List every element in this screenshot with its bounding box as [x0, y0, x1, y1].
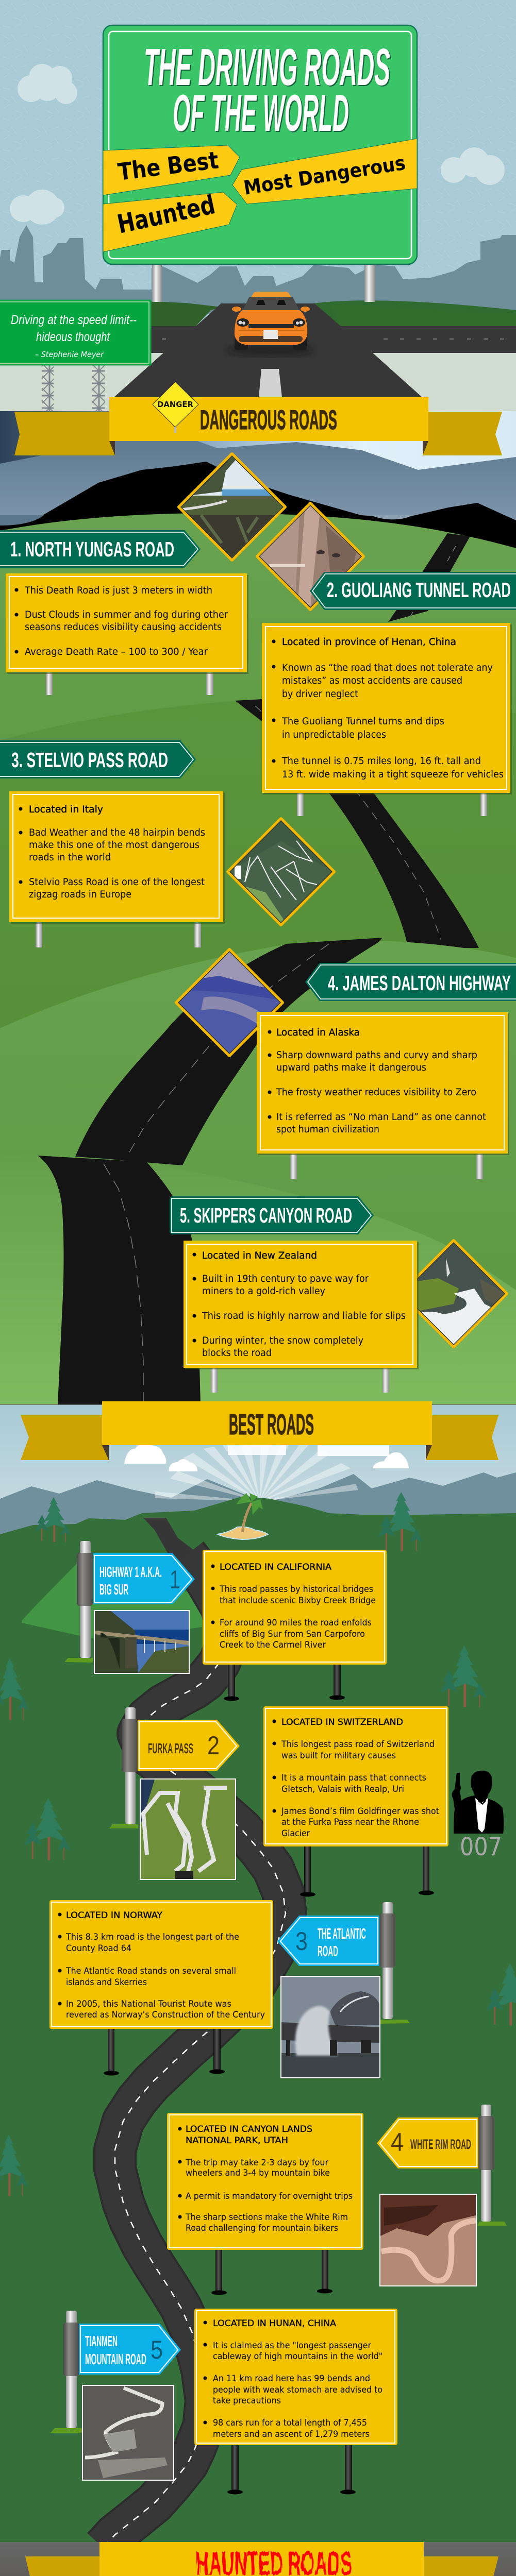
label: skippers canyon road: 5. SKIPPERS CANYON ROAD: [180, 1204, 352, 1227]
panel: stelvio facts: Located in Italy: [29, 804, 103, 815]
signpost 1: highway 1: HIGHWAY 1 A.K.A.: [99, 1564, 162, 1581]
quote sign legs: [42, 365, 105, 412]
signpost 1: highway 1: BIG SUR: [99, 1582, 128, 1598]
panel: switzerland facts: was built for military causes: [281, 1751, 396, 1760]
panel: switzerland facts: It is a mountain pass that connects: [281, 1773, 426, 1783]
banner: haunted roads: [25, 2542, 498, 2576]
photo: tianmen mountain: [82, 2385, 174, 2481]
banner: dangerous roads: [14, 382, 502, 455]
signpost 3: the atlantic road: ROAD: [318, 1943, 338, 1960]
signpost 4: white rim road: 4: [391, 2128, 404, 2157]
hill four: [0, 1156, 516, 1404]
clouds: [124, 1445, 409, 1471]
panel: james dalton facts: spot human civilization: [276, 1124, 379, 1135]
signpost 5: tianmen mountain road: [51, 2311, 181, 2433]
panel: switzerland facts: [263, 1706, 448, 1897]
panel: north yungas facts: Average Death Rate – 100 to 300 / Year: [25, 647, 208, 657]
panel: california facts: LOCATED IN CALIFORNIA: [220, 1562, 332, 1572]
panel: skippers canyon facts: blocks the road: [202, 1348, 272, 1359]
panel: guoliang facts: by driver neglect: [282, 689, 358, 700]
panel: guoliang facts: The Guoliang Tunnel turns and dips: [281, 716, 444, 727]
banner: best roads: BEST ROADS: [229, 1408, 314, 1441]
panel: hunan facts: cableway of high mountains in the world": [213, 2351, 382, 2361]
panel: skippers canyon facts: miners to a gold-rich valley: [202, 1286, 325, 1297]
panel: skippers canyon facts: Built in 19th century to pave way for: [202, 1274, 369, 1284]
signpost 5: tianmen mountain road: 5: [151, 2335, 163, 2364]
icon: james bond 007 silhouette: 007: [460, 1833, 502, 1861]
road segment three: [75, 938, 382, 1165]
ribbon: haunted: [103, 190, 237, 252]
icon: danger diamond: [153, 382, 198, 433]
section: dangerous roads landscape: [0, 411, 516, 567]
icon: danger diamond: DANGER: [157, 400, 194, 409]
sign posts: [152, 263, 375, 302]
icon: james bond 007 silhouette: [452, 1771, 504, 1861]
road segment two: [235, 699, 479, 948]
road crossing: [0, 303, 516, 398]
ribbon: haunted: Haunted: [114, 190, 218, 240]
hill two: [0, 698, 516, 1082]
panel: hunan facts: It is claimed as the "longest passenger: [213, 2341, 372, 2350]
signpost 5: tianmen mountain road: TIANMEN: [85, 2333, 118, 2350]
label: stelvio pass road: [0, 740, 196, 778]
panel: norway facts: [49, 1900, 273, 2075]
panel: switzerland facts: This longest pass road of Switzerland: [281, 1739, 435, 1749]
panel: utah facts: LOCATED IN CANYON LANDS: [186, 2124, 312, 2134]
panel: james dalton facts: [257, 1012, 509, 1179]
panel: hunan facts: LOCATED IN HUNAN, CHINA: [213, 2318, 337, 2328]
photo diamond: james dalton: [176, 950, 282, 1056]
green land: [0, 1496, 516, 2545]
road segment four: [38, 1156, 201, 1404]
mountains: [0, 1472, 516, 1546]
title road sign: [103, 25, 417, 264]
panel: skippers canyon facts: This road is highly narrow and liable for slips: [202, 1311, 406, 1321]
label: guoliang tunnel road: [310, 572, 516, 610]
panel: james dalton facts: upward paths make it dangerous: [276, 1062, 426, 1073]
best road: [103, 1518, 286, 2548]
panel: norway facts: This 8.3 km road is the longest part of the: [65, 1932, 239, 1942]
signpost 2: furka pass: FURKA PASS: [148, 1740, 193, 1756]
banner: dangerous roads: DANGEROUS ROADS: [200, 405, 337, 435]
quote sign: – Stephenie Meyer: [35, 350, 105, 359]
signpost 3: the atlantic road: [277, 1902, 410, 2024]
photo diamond: guoliang: [257, 503, 363, 609]
label: north yungas road: 1. NORTH YUNGAS ROAD: [10, 537, 174, 561]
section: title sky background: [0, 0, 516, 412]
signpost 4: white rim road: [377, 2105, 507, 2226]
panel: skippers canyon facts: [184, 1241, 419, 1393]
signpost 3: the atlantic road: 3: [295, 1927, 308, 1956]
title text: [144, 39, 390, 142]
photo: atlantic road: [280, 1976, 380, 2078]
panel: norway facts: In 2005, this National Tourist Route was: [66, 1999, 231, 2009]
light green hill: [22, 1558, 202, 1641]
panel: james dalton facts: The frosty weather reduces visibility to Zero: [276, 1087, 476, 1098]
label: stelvio pass road: 3. STELVIO PASS ROAD: [11, 748, 168, 772]
label: skippers canyon road: [170, 1196, 374, 1234]
panel: stelvio facts: zigzag roads in Europe: [29, 889, 131, 900]
signpost 3: the atlantic road: THE ATLANTIC: [318, 1926, 366, 1942]
panel: stelvio facts: Bad Weather and the 48 hairpin bends: [29, 827, 205, 838]
panel: california facts: [203, 1550, 387, 1701]
panel: california facts: For around 90 miles the road enfolds: [220, 1618, 372, 1628]
road segment one: [388, 533, 470, 622]
panel: hunan facts: 98 cars run for a total length of 7,455: [213, 2418, 367, 2428]
section: best roads landscape: [0, 1405, 516, 2545]
photo: bixby creek bridge: [94, 1610, 190, 1674]
panel: switzerland facts: LOCATED IN SWITZERLAND: [281, 1717, 403, 1727]
signpost 2: furka pass: 2: [207, 1731, 220, 1760]
ribbon: most dangerous: Most Dangerous: [242, 151, 407, 199]
car: orange hatchback: [226, 292, 315, 357]
panel: california facts: that include scenic Bixby Creek Bridge: [220, 1596, 376, 1605]
roadside ground: [0, 352, 516, 412]
panel: norway facts: The Atlantic Road stands on several small: [65, 1966, 236, 1976]
panel: norway facts: islands and Skerries: [66, 1977, 147, 1987]
quote sign: Driving at the speed limit--: [11, 313, 137, 327]
panel: hunan facts: people with weak stomach are advised to: [213, 2385, 382, 2395]
panel: switzerland facts: Glacier: [281, 1828, 310, 1838]
panel: stelvio facts: [9, 791, 225, 947]
panel: hunan facts: take precautions: [213, 2396, 281, 2405]
panel: north yungas facts: This Death Road is just 3 meters in width: [24, 585, 212, 596]
city skyline: [0, 225, 516, 314]
panel: guoliang facts: mistakes” as most accidents are caused: [282, 675, 462, 686]
green hills: [151, 300, 516, 327]
panel: north yungas facts: seasons reduces visibility causing accidents: [25, 622, 222, 633]
signpost 1: highway 1: 1: [170, 1565, 180, 1594]
banner: best roads: [21, 1401, 498, 1460]
photo diamond: north yungas: [179, 454, 285, 560]
panel: guoliang facts: Located in province of Henan, China: [282, 637, 456, 648]
section: haunted roads landscape: [0, 2542, 516, 2576]
photo: white rim road: [379, 2194, 477, 2286]
panel: hunan facts: An 11 km road here has 99 bends and: [213, 2374, 370, 2383]
sun rays: [155, 1445, 358, 1501]
panel: utah facts: Road challenging for mountain bikers: [186, 2223, 338, 2233]
panel: utah facts: The sharp sections make the White Rim: [185, 2212, 348, 2222]
panel: switzerland facts: Gletsch, Valais with Realp, Uri: [281, 1784, 404, 1794]
palm island: [218, 1493, 268, 1539]
clouds: [10, 64, 505, 225]
panel: stelvio facts: Stelvio Pass Road is one of the longest: [29, 877, 205, 888]
panel: guoliang facts: The tunnel is 0.75 miles long, 16 ft. tall and: [281, 756, 481, 767]
panel: norway facts: revered as Norway’s Construction of the Century: [66, 2010, 265, 2020]
panel: utah facts: wheelers and 3-4 by mountain bike: [186, 2168, 330, 2178]
panel: north yungas facts: Dust Clouds in summer and fog during other: [25, 609, 228, 620]
panel: utah facts: [167, 2113, 363, 2295]
panel: skippers canyon facts: Located in New Zealand: [202, 1250, 317, 1261]
ribbon: the best: [103, 145, 240, 195]
photo diamond: skippers canyon: [417, 1239, 508, 1348]
panel: stelvio facts: roads in the world: [29, 852, 111, 863]
signpost 1: highway 1: [64, 1541, 195, 1663]
hill three: [0, 940, 516, 1298]
hill one: [0, 513, 516, 747]
panel: james dalton facts: Sharp downward paths and curvy and sharp: [276, 1050, 477, 1061]
ribbon: most dangerous: [232, 139, 417, 204]
panel: hunan facts: [194, 2309, 397, 2495]
panel: california facts: Creek to the Carmel River: [220, 1640, 326, 1650]
label: james dalton highway: [305, 963, 516, 1001]
panel: hunan facts: meters and an ascent of 1,279 meters: [213, 2429, 370, 2439]
panel: james dalton facts: Located in Alaska: [276, 1027, 360, 1038]
signpost 2: furka pass: [109, 1707, 240, 1828]
panel: skippers canyon facts: During winter, the snow completely: [202, 1335, 363, 1346]
quote sign: [0, 300, 151, 365]
panel: switzerland facts: James Bond’s film Goldfinger was shot: [281, 1806, 439, 1816]
quote sign: hideous thought: [36, 330, 110, 344]
panel: guoliang facts: in unpredictable places: [282, 730, 386, 740]
panel: utah facts: The trip may take 2-3 days by four: [185, 2158, 329, 2167]
panel: north yungas facts: [6, 573, 248, 695]
panel: norway facts: LOCATED IN NORWAY: [66, 1910, 163, 1920]
panel: guoliang facts: Known as “the road that does not tolerate any: [282, 663, 493, 673]
panel: norway facts: County Road 64: [66, 1943, 131, 1953]
trees: [0, 1492, 516, 2196]
photo: furka pass: [140, 1778, 236, 1880]
signpost 5: tianmen mountain road: MOUNTAIN ROAD: [85, 2351, 146, 2368]
panel: utah facts: A permit is mandatory for overnight trips: [186, 2191, 353, 2201]
panel: guoliang facts: [262, 623, 512, 816]
panel: james dalton facts: It is referred as “No man Land” as one cannot: [276, 1112, 486, 1123]
panel: guoliang facts: 13 ft. wide making it a tight squeeze for vehicles: [282, 769, 504, 780]
panel: california facts: This road passes by historical bridges: [219, 1584, 373, 1594]
label: north yungas road: [0, 530, 201, 568]
panel: switzerland facts: at the Furka Pass near the Rhone: [281, 1817, 419, 1827]
panel: stelvio facts: make this one of the most dangerous: [29, 840, 199, 851]
panel: utah facts: NATIONAL PARK, UTAH: [186, 2136, 288, 2145]
panel: california facts: cliffs of Big Sur from San Carpoforo: [220, 1629, 365, 1639]
photo diamond: stelvio: [228, 819, 334, 925]
ribbon: the best: The Best: [116, 146, 220, 186]
